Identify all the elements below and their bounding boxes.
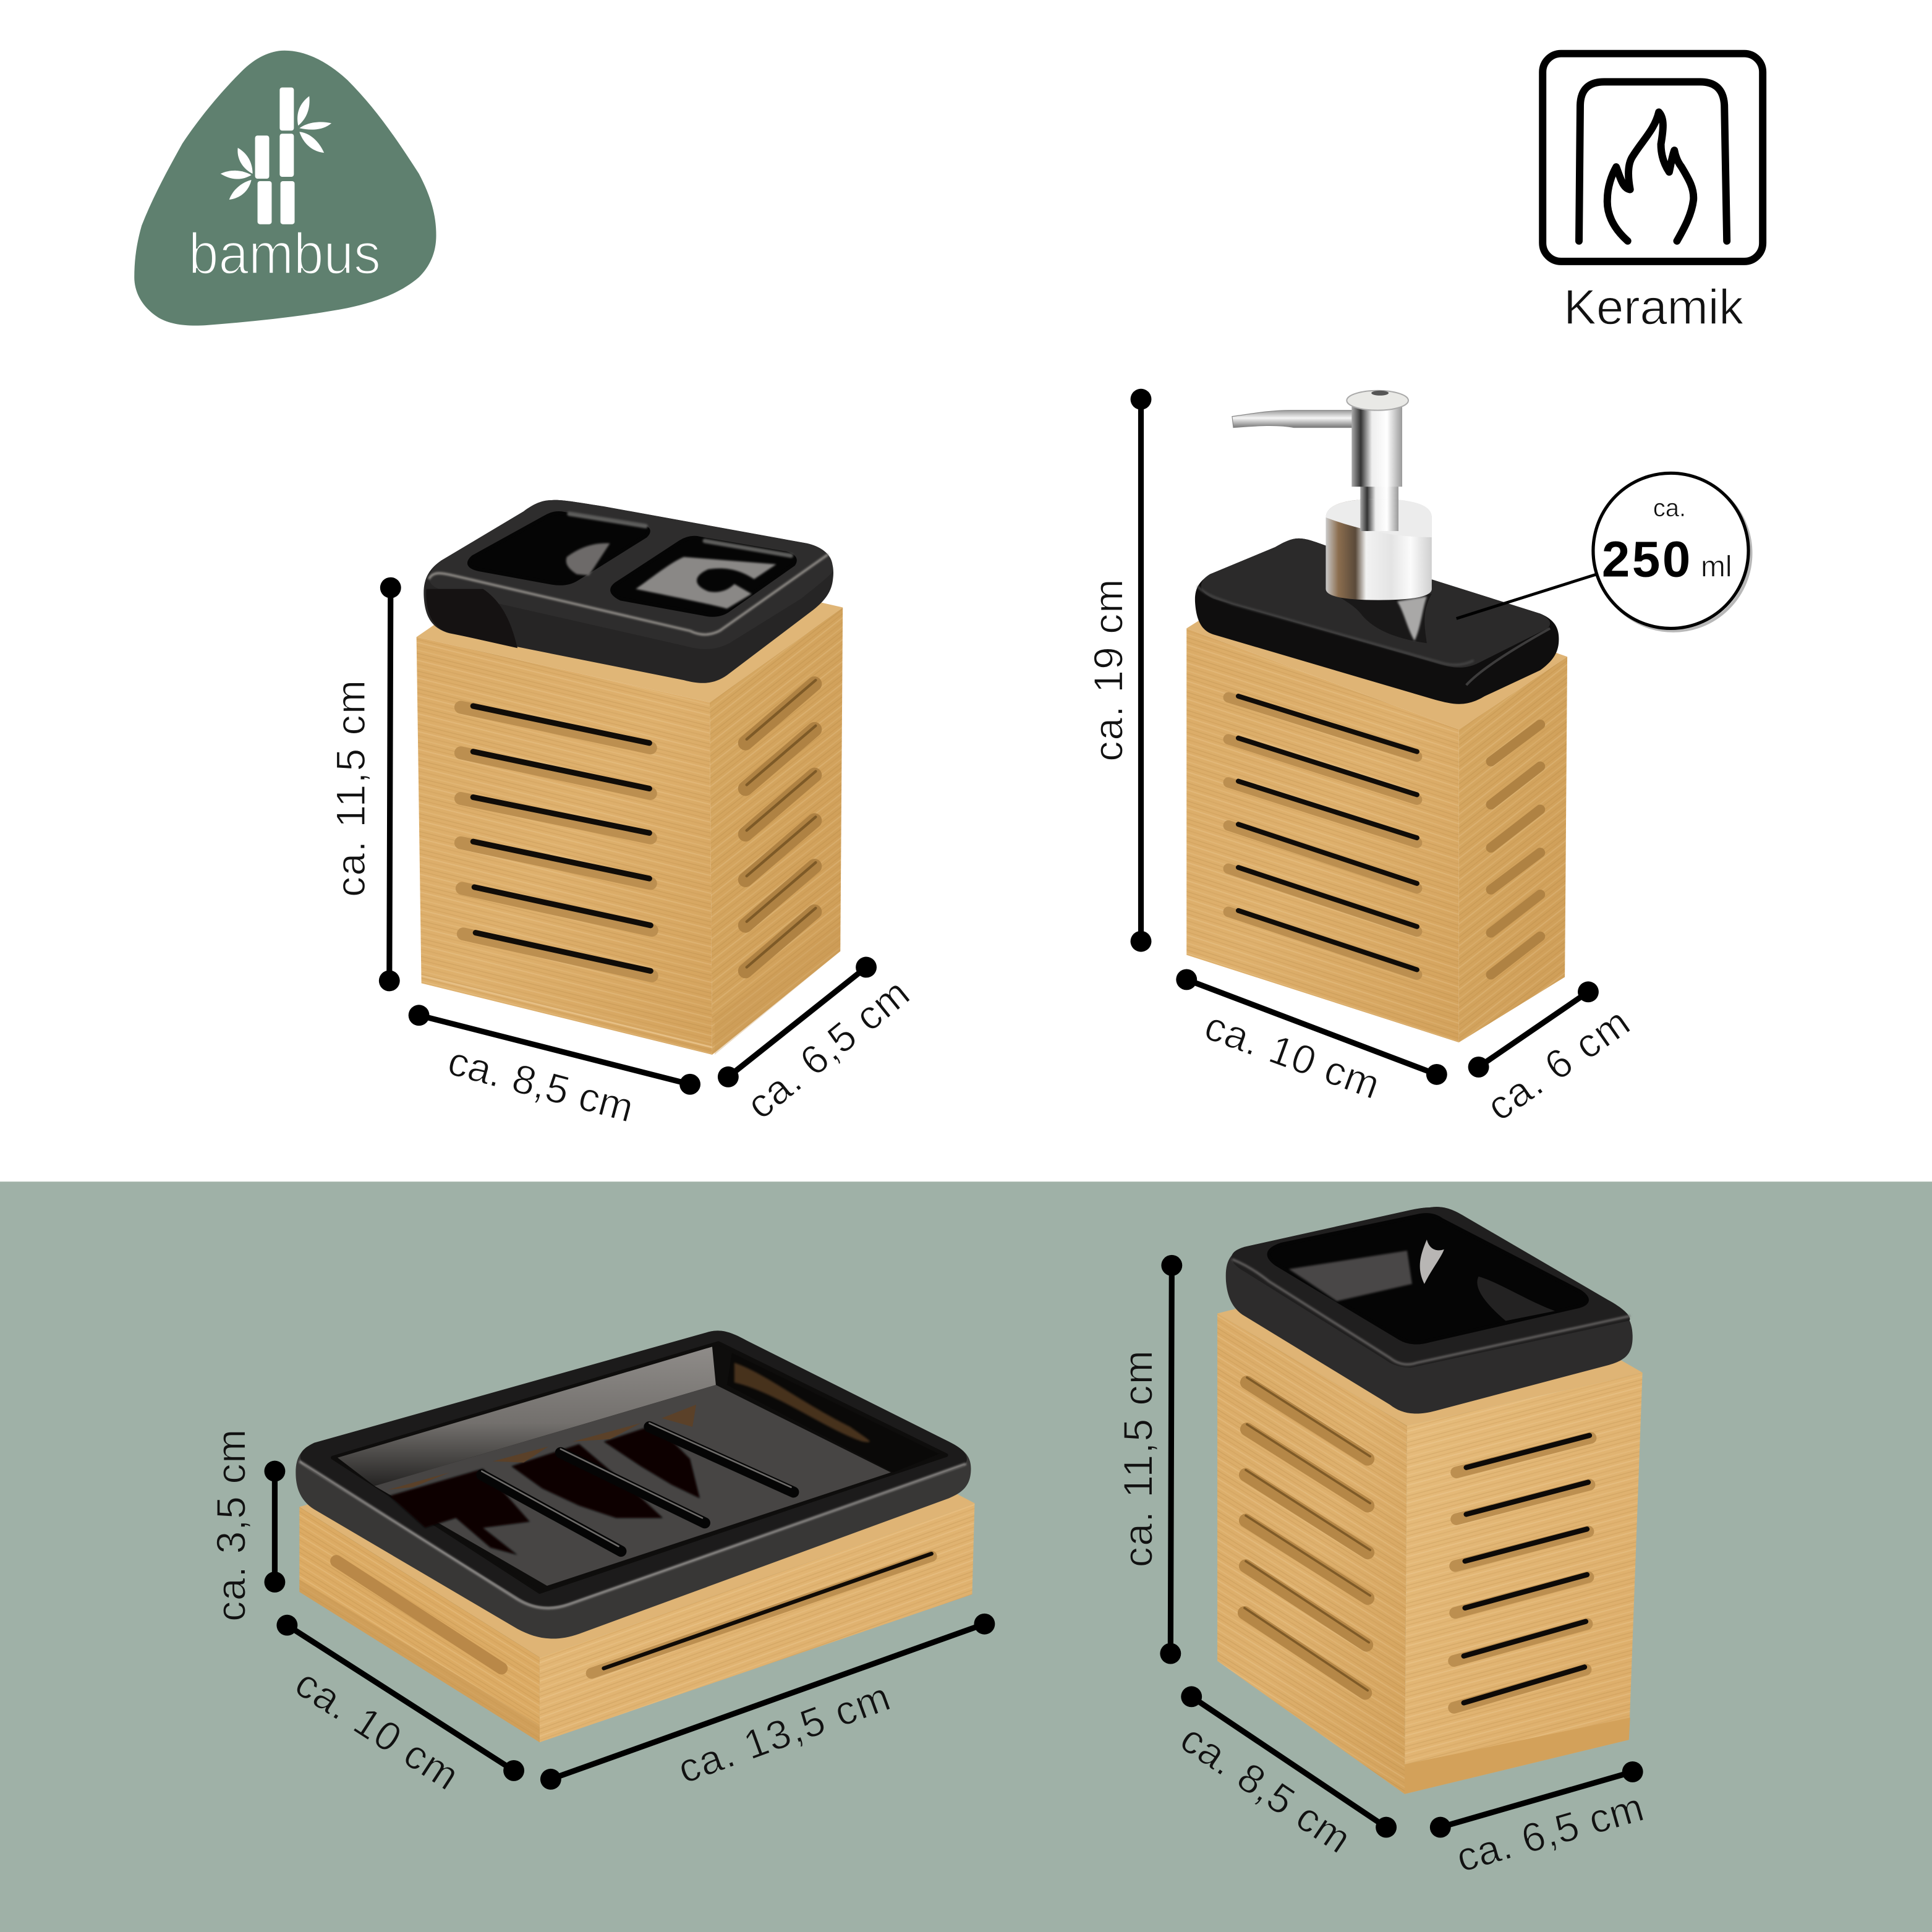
product: tumbler — [1217, 1207, 1643, 1794]
dimension: depth 8,5 cm — [1172, 1686, 1397, 1862]
front slots — [1228, 696, 1417, 974]
logo: bambus badge: bambus — [189, 221, 381, 286]
left face slots — [1245, 1382, 1368, 1693]
dimension: height 3,5 cm — [208, 1429, 285, 1622]
callout: 250 ml capacity: ca. — [1653, 495, 1686, 522]
dimension: height 19 cm: ca. 19 cm — [1086, 579, 1131, 762]
chrome stem — [1347, 391, 1408, 521]
product: soap dispenser — [1186, 391, 1567, 1042]
side slots — [746, 684, 814, 971]
wood body — [417, 542, 843, 1055]
ceramic tray — [296, 1330, 971, 1639]
dimension: depth 6 cm: ca. 6 cm — [1478, 998, 1638, 1130]
wood body — [1217, 1257, 1643, 1794]
chrome collar — [1326, 499, 1432, 600]
product: toothbrush holder — [417, 500, 843, 1055]
label: Keramik: Keramik — [1564, 279, 1743, 334]
callout: 250 ml capacity: 250 — [1602, 532, 1690, 588]
ceramic top — [1195, 538, 1559, 704]
panel: lower sage green band — [0, 1181, 1932, 1932]
dimension: width 8,5 cm — [409, 1005, 700, 1131]
dimension: depth 8,5 cm: ca. 8,5 cm — [1172, 1715, 1360, 1862]
wood body — [1186, 561, 1567, 1042]
dimension: height 19 cm — [1086, 389, 1151, 952]
product: soap dish — [296, 1330, 974, 1742]
dimension: width 13,5 cm — [540, 1614, 995, 1792]
dimension: depth 6,5 cm: ca. 6,5 cm — [738, 969, 917, 1128]
chrome spout — [1232, 411, 1355, 428]
side slots — [1491, 725, 1540, 974]
ceramic double tray — [423, 500, 833, 683]
wood base — [299, 1380, 974, 1742]
dimension: width 10 cm — [1176, 969, 1447, 1108]
icon: ceramic kiln with flame — [1543, 54, 1763, 262]
dimension: depth 10 cm — [276, 1615, 524, 1798]
dimension: height 3,5 cm: ca. 3,5 cm — [208, 1429, 254, 1622]
dimension: width 13,5 cm: ca. 13,5 cm — [671, 1673, 896, 1792]
dimension: width 6,5 cm: ca. 6,5 cm — [1451, 1784, 1648, 1881]
ceramic cup — [1226, 1207, 1633, 1414]
callout: 250 ml capacity — [1457, 473, 1751, 631]
logo: bambus badge — [134, 51, 436, 326]
callout: 250 ml capacity: ml — [1701, 551, 1732, 584]
dimension: height 11,5 cm: ca. 11,5 cm — [1115, 1350, 1160, 1567]
wood slots — [336, 1554, 932, 1673]
right face slots — [1454, 1436, 1591, 1708]
dimension: height 11,5 cm — [328, 577, 401, 991]
front slots — [461, 706, 652, 976]
dimension: height 11,5 cm — [1115, 1255, 1182, 1664]
dimension: width 8,5 cm: ca. 8,5 cm — [443, 1037, 639, 1131]
dimension: width 10 cm: ca. 10 cm — [1199, 1002, 1386, 1108]
dimension: depth 10 cm: ca. 10 cm — [287, 1659, 467, 1798]
dimension: height 11,5 cm: ca. 11,5 cm — [328, 680, 373, 897]
